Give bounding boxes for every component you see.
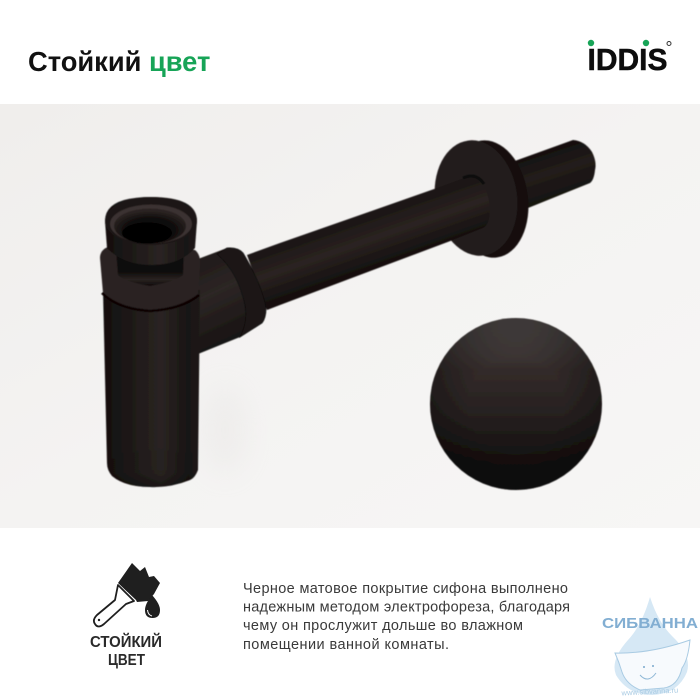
description text: надежным методом электрофореза, благодаря [243,600,570,616]
icon label: СТОЙКИЙ [90,633,162,651]
wall flange [427,135,536,263]
socket [105,197,197,265]
icon label: ЦВЕТ [108,652,145,669]
brush handle [94,585,134,626]
logo: IDDIS: IDDIS [588,42,668,77]
watermark: Sibvanna [602,597,698,698]
socket opening [114,208,186,244]
product: siphon [100,135,596,487]
title: Стойкий цвет [28,46,210,77]
description text: чему он прослужит дольше во влажном [243,618,523,634]
paint drop [145,595,160,618]
neck [116,250,184,286]
icon: paint brush [94,563,160,626]
collar [217,248,266,337]
horizontal tube [247,176,490,310]
brush bristles [118,563,160,602]
elbow joint [198,248,266,354]
description text: Черное матовое покрытие сифона выполнено [243,581,568,597]
description text: помещении ванной комнаты. [243,637,449,653]
material sample sphere [430,318,602,490]
watermark: Sibvanna: СИБВАННА [602,615,698,632]
outer tube end [512,140,596,208]
watermark: Sibvanna: www.sibvanna.ru [620,686,678,698]
panel: product photo [0,104,700,528]
ring [100,247,200,310]
vertical body [103,290,200,487]
